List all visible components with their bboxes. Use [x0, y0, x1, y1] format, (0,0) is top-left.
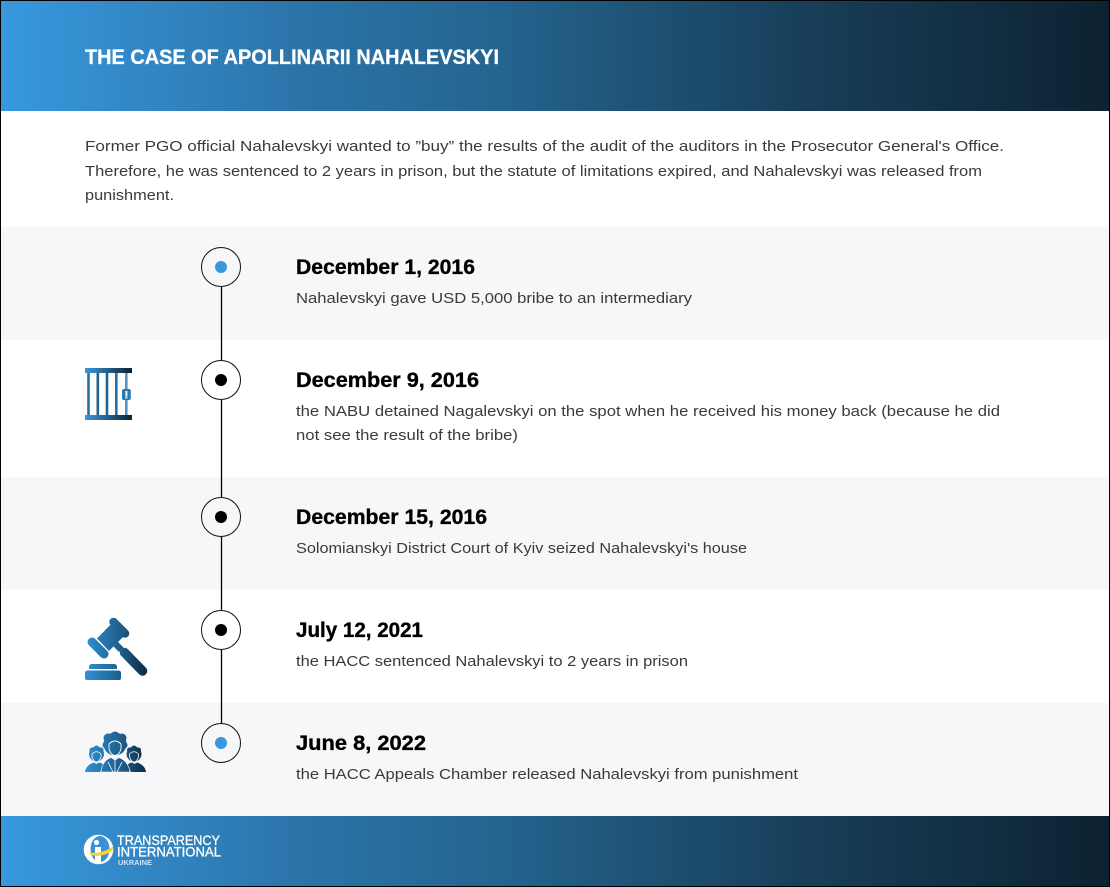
logo: Transparency International Ukraine: UKRAINE — [118, 860, 152, 867]
timeline marker: July 12, 2021 — [202, 610, 240, 650]
event: June 8, 2022 — [296, 732, 799, 783]
event: December 1, 2016: December 1, 2016 — [296, 256, 475, 279]
header band — [1, 1, 1109, 111]
event: December 9, 2016: the NABU detained Nagalevskyi on the spot when he received his money back (because he did — [296, 403, 1000, 420]
timeline marker: December 9, 2016 — [202, 360, 240, 400]
logo: Transparency International Ukraine: TRANSPARENCY — [117, 833, 220, 848]
event: December 9, 2016: December 9, 2016 — [296, 369, 479, 392]
event: July 12, 2021: July 12, 2021 — [296, 619, 423, 642]
event: June 8, 2022: June 8, 2022 — [296, 732, 426, 755]
footer band — [1, 816, 1109, 886]
event: June 8, 2022: the HACC Appeals Chamber released Nahalevskyi from punishment — [296, 766, 799, 783]
event: July 12, 2021: the HACC sentenced Nahalevskyi to 2 years in prison — [296, 653, 688, 670]
event: December 9, 2016: not see the result of the bribe) — [296, 427, 518, 444]
event: July 12, 2021 — [296, 619, 688, 670]
intro paragraph — [85, 138, 1004, 204]
event: December 15, 2016: December 15, 2016 — [296, 506, 487, 529]
row backgrounds — [1, 227, 1109, 816]
timeline marker: December 15, 2016 — [202, 498, 240, 536]
timeline marker: December 1, 2016 — [202, 248, 240, 286]
logo: Transparency International Ukraine — [84, 833, 221, 867]
event: December 15, 2016: Solomianskyi District Court of Kyiv seized Nahalevskyi's house — [296, 540, 747, 557]
title: THE CASE OF APOLLINARII NAHALEVSKYI — [85, 46, 499, 69]
logo: Transparency International Ukraine: INTERNATIONAL — [117, 844, 221, 860]
event: December 15, 2016 — [296, 506, 747, 557]
timeline marker: June 8, 2022 — [202, 724, 240, 762]
icon: group of judges — [85, 732, 146, 772]
event: December 1, 2016: Nahalevskyi gave USD 5,000 bribe to an intermediary — [296, 290, 693, 307]
intro paragraph: Former PGO official Nahalevskyi wanted to ”buy” the results of the audit of the auditors in the Prosecutor General's Office. — [85, 138, 1004, 155]
intro paragraph: Therefore, he was sentenced to 2 years in prison, but the statute of limitations expired, and Nahalevskyi was released from — [85, 163, 982, 180]
icon: judge gavel — [85, 622, 142, 680]
event: December 1, 2016 — [296, 256, 693, 307]
event: December 9, 2016 — [296, 369, 1000, 444]
timeline line — [220, 267, 222, 743]
icon: prison bars — [85, 368, 132, 420]
intro paragraph: punishment. — [85, 187, 174, 204]
